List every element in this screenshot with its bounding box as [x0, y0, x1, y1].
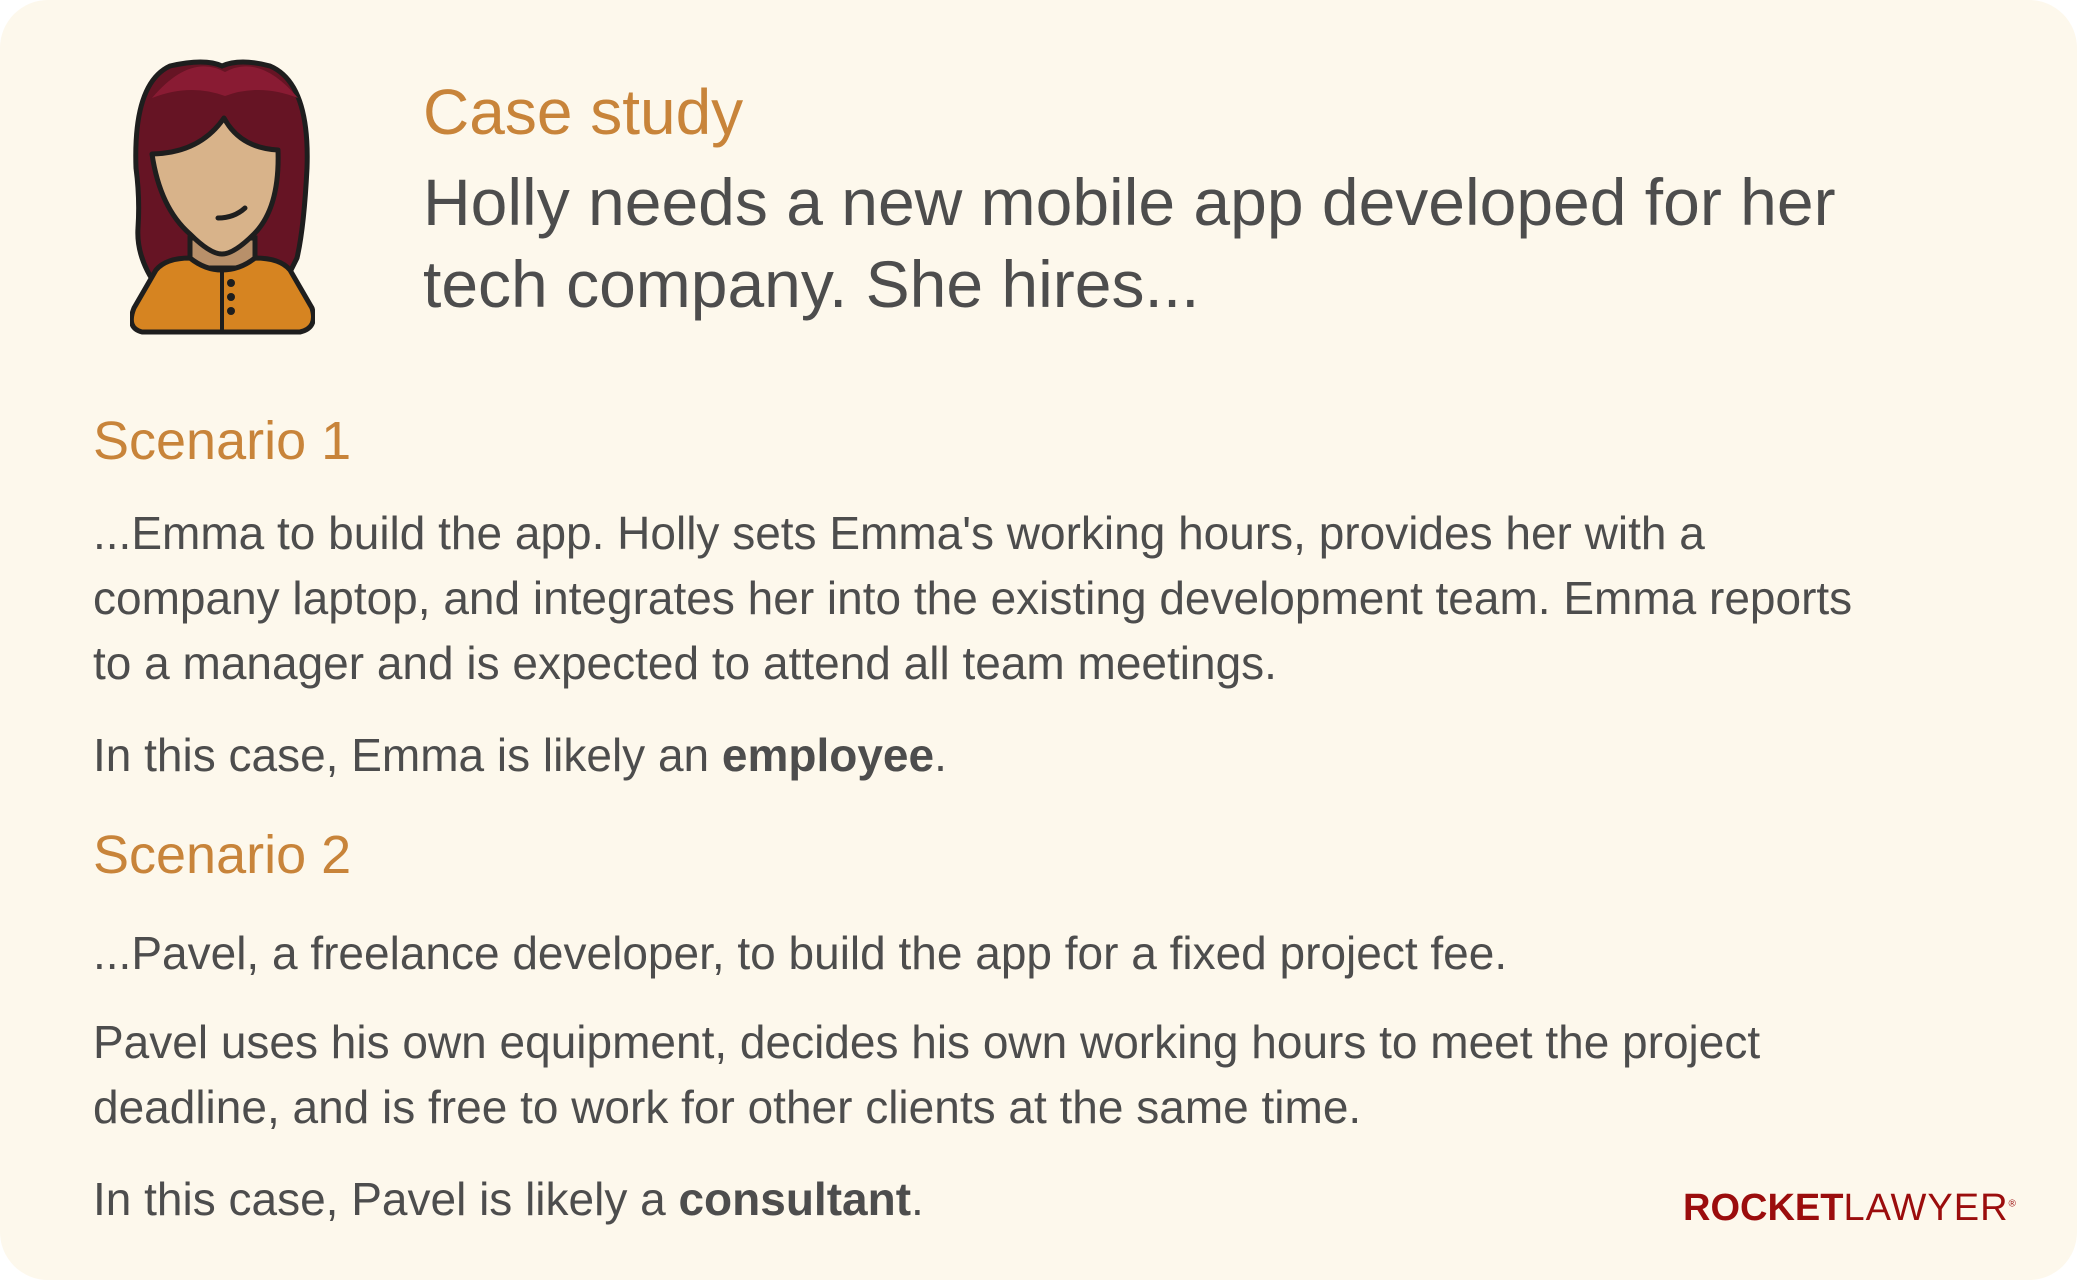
heading: Case study: Case study — [423, 76, 743, 148]
heading: Scenario 2: Scenario 2 — [93, 825, 351, 885]
text block: Pavel details: Pavel uses his own equipment, decides his own working hours to meet the project — [93, 1016, 1760, 1068]
text block: scenario 1: ...Emma to build the app. Holly sets Emma's working hours, provides her with a — [93, 507, 1705, 559]
text block: Pavel details — [93, 1016, 1760, 1133]
heading: Scenario 1: Scenario 1 — [93, 411, 351, 471]
headline: tech company. She hires... — [423, 247, 1200, 321]
headline — [423, 165, 1836, 321]
icon: woman avatar — [130, 60, 315, 334]
headline: Holly needs a new mobile app developed for her — [423, 165, 1836, 239]
text block: scenario 1: to a manager and is expected to attend all team meetings. — [93, 637, 1277, 689]
text block: scenario 2: ...Pavel, a freelance developer, to build the app for a fixed project fee. — [93, 927, 1507, 979]
text block: scenario 1: company laptop, and integrates her into the existing development team. Emma reports — [93, 572, 1852, 624]
text: employee conclusion: In this case, Emma is likely an employee. — [93, 729, 947, 781]
text: consultant conclusion: In this case, Pavel is likely a consultant. — [93, 1173, 924, 1225]
text block: scenario 1 — [93, 507, 1852, 689]
text block: Pavel details: deadline, and is free to work for other clients at the same time. — [93, 1081, 1361, 1133]
logo: Rocket Lawyer: ROCKETLAWYER® — [1683, 1187, 2017, 1229]
